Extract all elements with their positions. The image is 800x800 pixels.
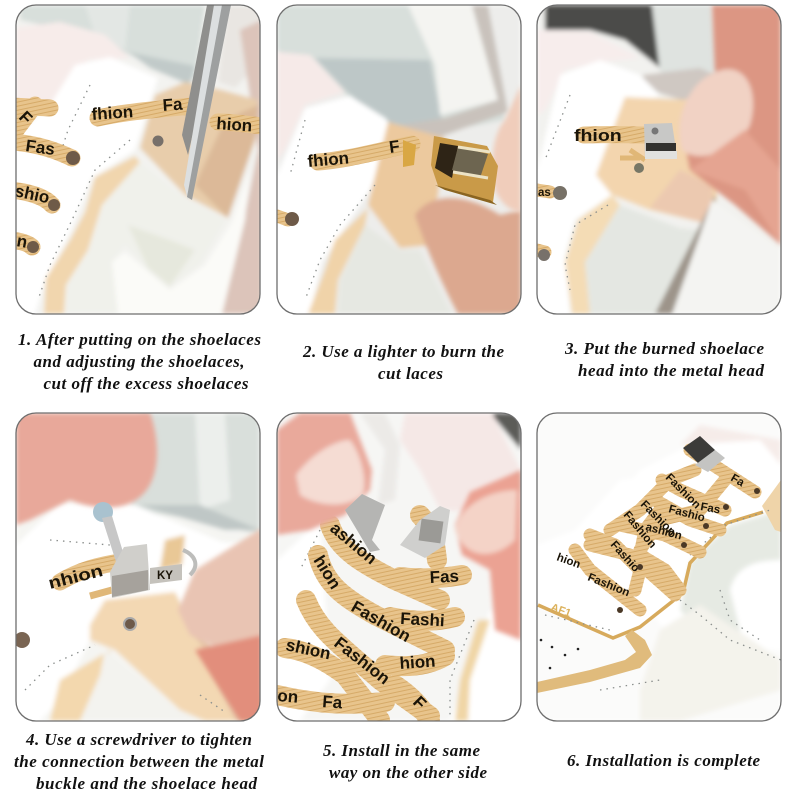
laces: ashion [326,519,381,568]
laces: hion [310,552,345,593]
lace with text: fhion [574,125,622,145]
laces: Fashio [667,503,706,524]
laces: Fa [162,95,184,115]
laces: Fas [429,566,459,587]
caption: step 5: 5. Install in the same [323,741,480,760]
caption: step 4 [14,730,264,793]
laces: Fas [699,501,721,516]
laces: fhion [91,102,134,124]
hand [679,5,781,245]
laces: Fashion [586,572,631,599]
caption: step 5 [323,741,487,782]
collar, mesh and tongue [277,5,521,314]
laces: hion [216,114,253,135]
metal head with KY mark: KY [157,570,173,582]
laces: Fas [24,136,56,159]
caption: step 4: 4. Use a screwdriver to tighten [25,730,252,749]
laces: fhion [307,148,350,171]
laces: Fashion [348,597,414,646]
stitching [545,95,608,290]
caption: step 1: 1. After putting on the shoelaces [18,330,261,349]
laces [277,515,462,721]
shoe collar background [16,5,262,314]
laces: F [388,137,401,157]
lower right finger [178,528,262,721]
tan tag [762,480,781,532]
laces: hion [555,552,582,571]
stitching [300,530,474,715]
laces: on [277,686,299,707]
caption: step 2 [302,342,504,383]
swoosh tan panel [537,630,652,693]
caption: step 3: 3. Put the burned shoelace [564,339,764,358]
perforations [540,639,579,669]
panel: step 6 photo, completed shoe [537,413,781,721]
laces: shio [13,181,51,207]
laces: Fashio [608,539,641,575]
caption: step 1: cut off the excess shoelaces [44,374,249,393]
caption: step 6: 6. Installation is complete [567,751,760,770]
metal head [644,123,677,159]
laces: Fa [322,692,343,712]
caption: step 2: 2. Use a lighter to burn the [302,342,504,361]
lower thumb [415,198,521,314]
scissors blades [182,5,231,200]
panel: step 2 photo, burning the lace [277,5,521,314]
caption: step 4: the connection between the metal [14,752,264,771]
panel: step 1 photo, cutting the excess lace [10,5,262,314]
laces: Fa [728,472,747,490]
laces: Fashion [331,633,394,688]
stitching [290,120,375,300]
laces: n [15,231,29,252]
caption: step 3 [564,339,764,380]
AF1 mark: AF1 [549,602,573,620]
panel: step 5 photo, installing on the other side [277,413,521,721]
laces: Fashion [638,499,678,538]
stitching [38,85,130,300]
stitching [25,540,225,712]
caption: step 5: way on the other side [329,763,487,782]
hole in the tan tongue [124,618,136,630]
laces [555,450,760,613]
screwdriver [93,502,122,562]
stitching [545,510,781,690]
gold metal head [431,136,498,205]
right finger with nail [455,470,521,640]
left finger with nail [277,413,372,535]
caption: step 1 [18,330,261,393]
upper finger [492,85,521,212]
laces [10,95,262,252]
laces: Fashion [621,509,658,551]
laces: ashion [644,521,683,542]
laces [277,137,412,226]
caption: step 2: cut laces [378,364,443,383]
metal buckle [683,436,725,472]
gold collar edge line [538,512,763,638]
lace with text: as [538,187,551,199]
panel: step 4 photo, tightening with a screwdriver [14,413,262,721]
tongue and collar [277,413,521,721]
caption: step 1: and adjusting the shoelaces, [34,352,244,371]
caption: step 3: head into the metal head [578,361,764,380]
metal head with KY mark [110,544,195,598]
eyelet [16,632,30,648]
collar and shoe [16,413,262,721]
metal buckle pieces [345,494,450,558]
shoe body [638,424,780,720]
laces: hion [399,652,436,673]
upper fingertip [16,413,157,525]
panel: step 3 photo, inserting the burned head [537,5,781,314]
laces: Fashion [663,472,703,511]
laces: Fashi [400,609,445,630]
charred lace end [403,140,416,167]
laces: F [15,107,36,128]
laces: F [409,692,430,713]
laces: shion [284,635,332,663]
caption: step 4: buckle and the shoelace head [36,774,258,793]
lace: nhion [46,561,105,593]
lace with text [537,125,648,261]
eyelets [27,136,164,253]
collar and tongue [537,5,781,314]
